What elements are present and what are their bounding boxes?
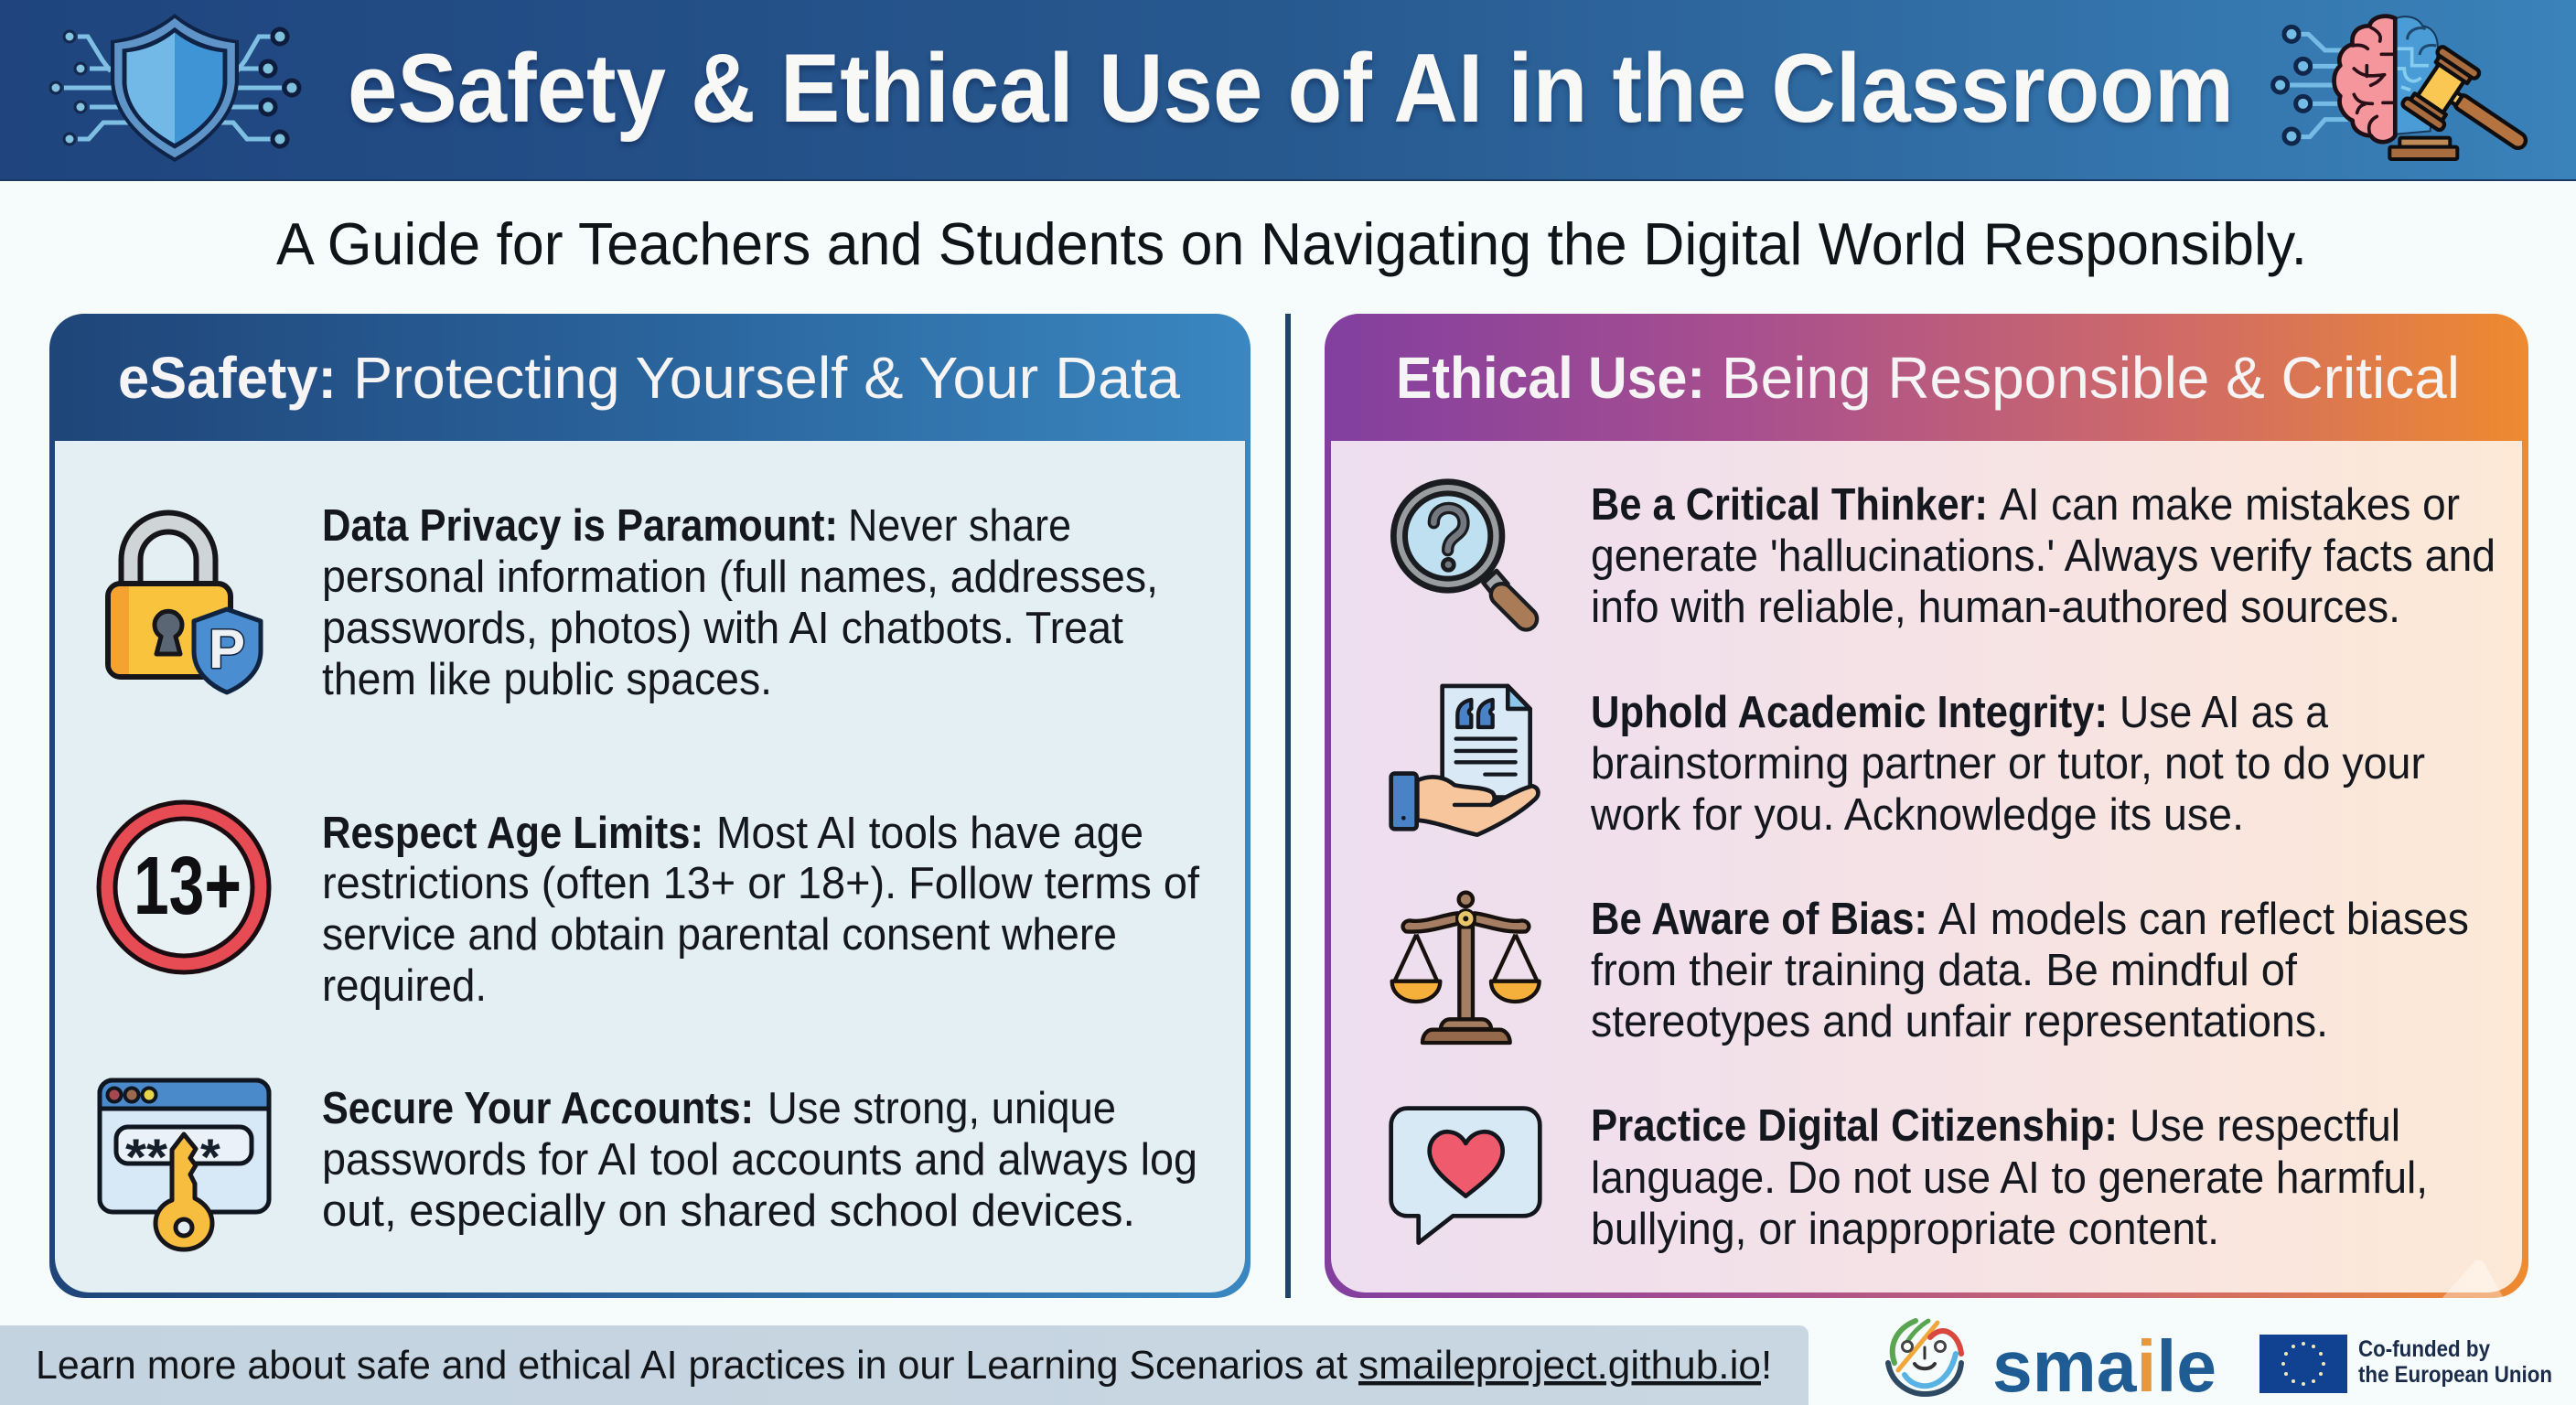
text: Age Limits: required. — [322, 961, 487, 1011]
footer banner: ! — [1761, 1343, 1772, 1388]
icon: brain and gavel — [2273, 16, 2544, 175]
logo: EU co-funded — [2259, 1335, 2552, 1393]
text: Academic Integrity — [1590, 688, 2425, 840]
text: Digital Citizenship: language. Do not use AI to generate harmful, — [1591, 1153, 2428, 1203]
heading: eSafety panel: eSafety: — [118, 345, 337, 411]
icon: document in hand — [1391, 686, 1538, 835]
logo: smaile: smaile — [1992, 1325, 2216, 1405]
heading: Ethical Use panel — [1396, 345, 2460, 411]
text: Data Privacy: them like public spaces. — [322, 655, 772, 704]
text: Academic Integrity: brainstorming partner or tutor, not to do your — [1591, 739, 2425, 788]
subtitle: A Guide for Teachers and Students on Navigating the Digital World Responsibly. — [276, 210, 2307, 277]
title: eSafety & Ethical Use of AI in the Classroom — [348, 33, 2234, 143]
text: Secure Accounts: out, especially on shared school devices. — [322, 1186, 1135, 1236]
text: Data Privacy: Data Privacy is Paramount: — [322, 501, 838, 551]
text: Digital Citizenship: Use respectful — [2130, 1101, 2400, 1151]
text: Secure Accounts: passwords for AI tool accounts and always log — [322, 1135, 1197, 1185]
text: Age Limits: restrictions (often 13+ or 18+). Follow terms of — [322, 859, 1199, 908]
icon part: gavel head and handle — [2401, 46, 2544, 175]
icon: 13+ age limit: 13+ — [134, 841, 242, 932]
icon: padlock with P shield: P — [209, 618, 245, 680]
text: Data Privacy: personal information (full names, addresses, — [322, 552, 1158, 602]
text: Age Limits: Most AI tools have age — [716, 809, 1143, 858]
text: Age Limits: service and obtain parental consent where — [322, 910, 1117, 960]
text: Data Privacy: Never share — [848, 501, 1071, 551]
text: Critical Thinker: generate 'hallucinations.' Always verify facts and — [1591, 531, 2496, 581]
icon: password window and key — [100, 1080, 269, 1249]
text: Academic Integrity: Uphold Academic Integrity: — [1591, 688, 2108, 737]
text: Digital Citizenship: bullying, or inappropriate content. — [1591, 1205, 2219, 1254]
logo: EU co-funded: the European Union — [2358, 1362, 2552, 1388]
text: Bias: stereotypes and unfair representations. — [1591, 997, 2328, 1046]
text: Critical Thinker — [1591, 480, 2496, 632]
text: Bias: from their training data. Be mindful of — [1591, 946, 2297, 995]
text: Bias — [1591, 895, 2469, 1046]
logo: smaile — [1888, 1321, 2216, 1405]
text: Bias: AI models can reflect biases — [1938, 895, 2469, 944]
text: Academic Integrity: work for you. Acknowledge its use. — [1590, 790, 2244, 840]
heading: eSafety panel: Protecting Yourself & Your Data — [353, 345, 1180, 411]
icon: magnifying glass with question mark — [1393, 482, 1526, 619]
text: Critical Thinker: AI can make mistakes or — [2000, 480, 2460, 530]
panel: Ethical Use — [1325, 314, 2528, 1300]
header banner — [0, 0, 2576, 181]
logo: EU co-funded: Co-funded by — [2358, 1336, 2490, 1362]
text: Data Privacy: passwords, photos) with AI chatbots. Treat — [322, 604, 1123, 653]
icon: shield with circuits — [50, 14, 299, 162]
text: Digital Citizenship: Practice Digital Citizenship: — [1591, 1101, 2118, 1151]
icon: password window and key: * — [200, 1128, 220, 1185]
text: Secure Accounts: Secure Your Accounts: — [322, 1084, 754, 1133]
text: Age Limits: Respect Age Limits: — [322, 809, 703, 858]
footer banner: smaileproject.github.io — [1358, 1343, 1761, 1388]
divider — [1285, 314, 1291, 1298]
text: Data Privacy — [322, 501, 1158, 704]
text: Secure Accounts: Use strong, unique — [767, 1084, 1116, 1133]
text: Critical Thinker: info with reliable, human-authored sources. — [1591, 583, 2400, 632]
text: Critical Thinker: Be a Critical Thinker: — [1591, 480, 1988, 530]
text: Secure Accounts — [322, 1084, 1197, 1236]
icon: balance scales — [1392, 893, 1540, 1043]
footer banner: Learn more about safe and ethical AI practices in our Learning Scenarios at — [36, 1343, 1347, 1388]
icon: padlock with P shield — [108, 522, 261, 692]
icon: speech bubble with heart — [1391, 1109, 1540, 1243]
panel: eSafety — [49, 314, 1250, 1298]
footer banner — [0, 1325, 1809, 1405]
heading: Ethical Use panel: Ethical Use: — [1396, 345, 1705, 411]
text: Age Limits — [322, 809, 1199, 1011]
text: Digital Citizenship — [1591, 1101, 2428, 1254]
heading: Ethical Use panel: Being Responsible & Critical — [1722, 345, 2460, 411]
text: Academic Integrity: Use AI as a — [2120, 688, 2329, 737]
text: Bias: Be Aware of Bias: — [1591, 895, 1927, 944]
icon: 13+ age limit — [107, 810, 261, 964]
icon: password window and key: ** — [125, 1128, 167, 1185]
